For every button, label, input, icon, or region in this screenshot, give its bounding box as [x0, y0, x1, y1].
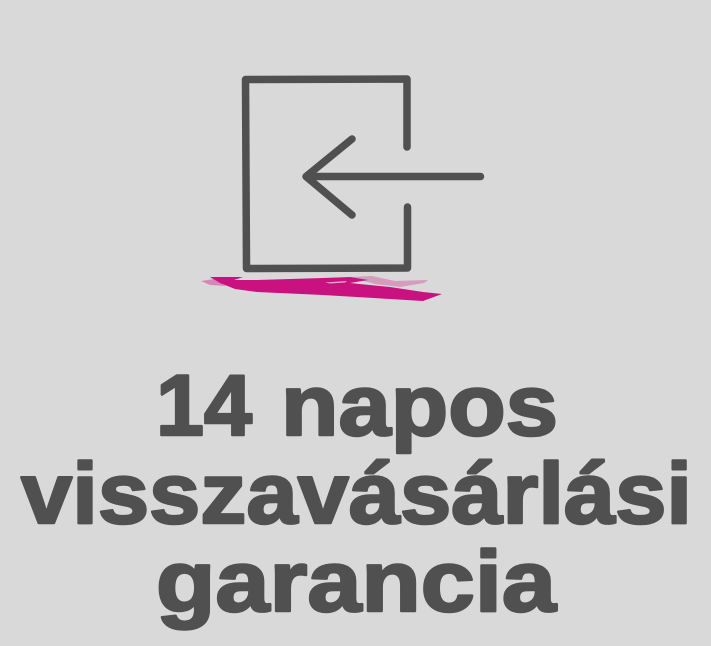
- icon: magenta brush stroke: [201, 276, 442, 301]
- title line 1: 14: [156, 358, 252, 454]
- title: 14 napos visszavásárlási garancia: [21, 358, 692, 630]
- title line 1: napos: [281, 358, 558, 454]
- title line 3: garancia: [156, 534, 557, 630]
- icon: return box with left arrow: [246, 79, 480, 268]
- title line 2: visszavásárlási: [21, 446, 692, 542]
